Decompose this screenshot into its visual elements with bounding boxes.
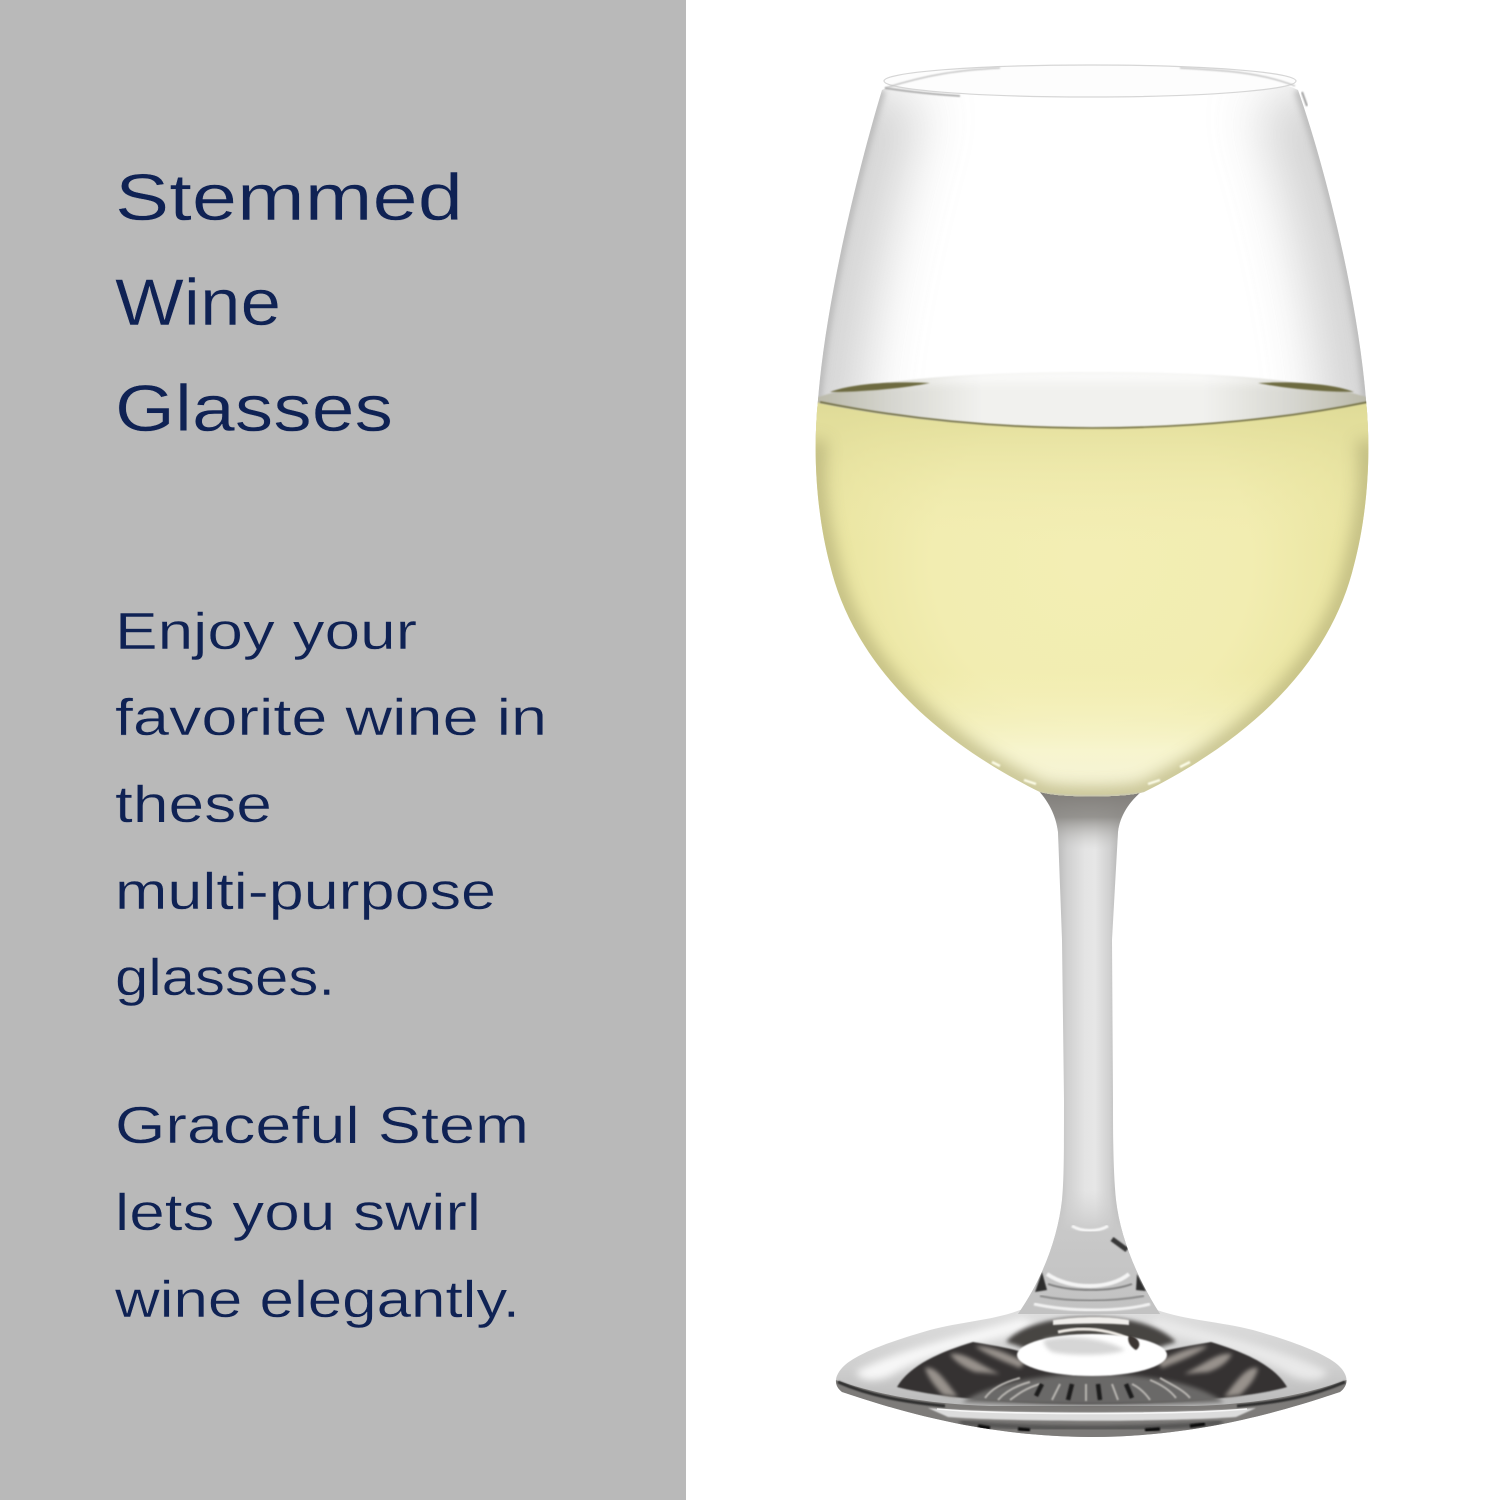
- foot dark reflection: [897, 1342, 1287, 1404]
- text block: graceful stem description: [114, 1097, 529, 1329]
- heading: Stemmed Wine Glasses: [115, 160, 463, 445]
- glass bowl: [816, 68, 1368, 796]
- text block: multi-purpose description: glasses.: [115, 949, 335, 1007]
- glass rim: [884, 65, 1307, 106]
- glass stem: [1018, 792, 1160, 1314]
- text block: graceful stem description: wine elegantly.: [114, 1271, 520, 1329]
- text block: multi-purpose description: favorite wine in: [115, 689, 547, 747]
- foot reflection stripes: [925, 1346, 1258, 1397]
- heading: Stemmed Wine Glasses: Glasses: [115, 371, 393, 445]
- wine: [800, 400, 1390, 810]
- foot central dome: [1006, 1317, 1176, 1350]
- glass foot: [830, 1310, 1352, 1445]
- heading: Stemmed Wine Glasses: Stemmed: [115, 160, 463, 234]
- text block: multi-purpose description: these: [115, 776, 272, 834]
- text block: multi-purpose description: Enjoy your: [115, 603, 417, 661]
- illustration: wine glass: [800, 65, 1390, 1445]
- text block: multi-purpose description: [115, 603, 547, 1007]
- text block: multi-purpose description: multi-purpose: [115, 863, 496, 921]
- panel: grey text column: [0, 0, 686, 1500]
- heading: Stemmed Wine Glasses: Wine: [115, 265, 281, 339]
- text block: graceful stem description: lets you swirl: [115, 1184, 481, 1242]
- text block: graceful stem description: Graceful Stem: [115, 1097, 529, 1155]
- wine surface: [815, 372, 1370, 428]
